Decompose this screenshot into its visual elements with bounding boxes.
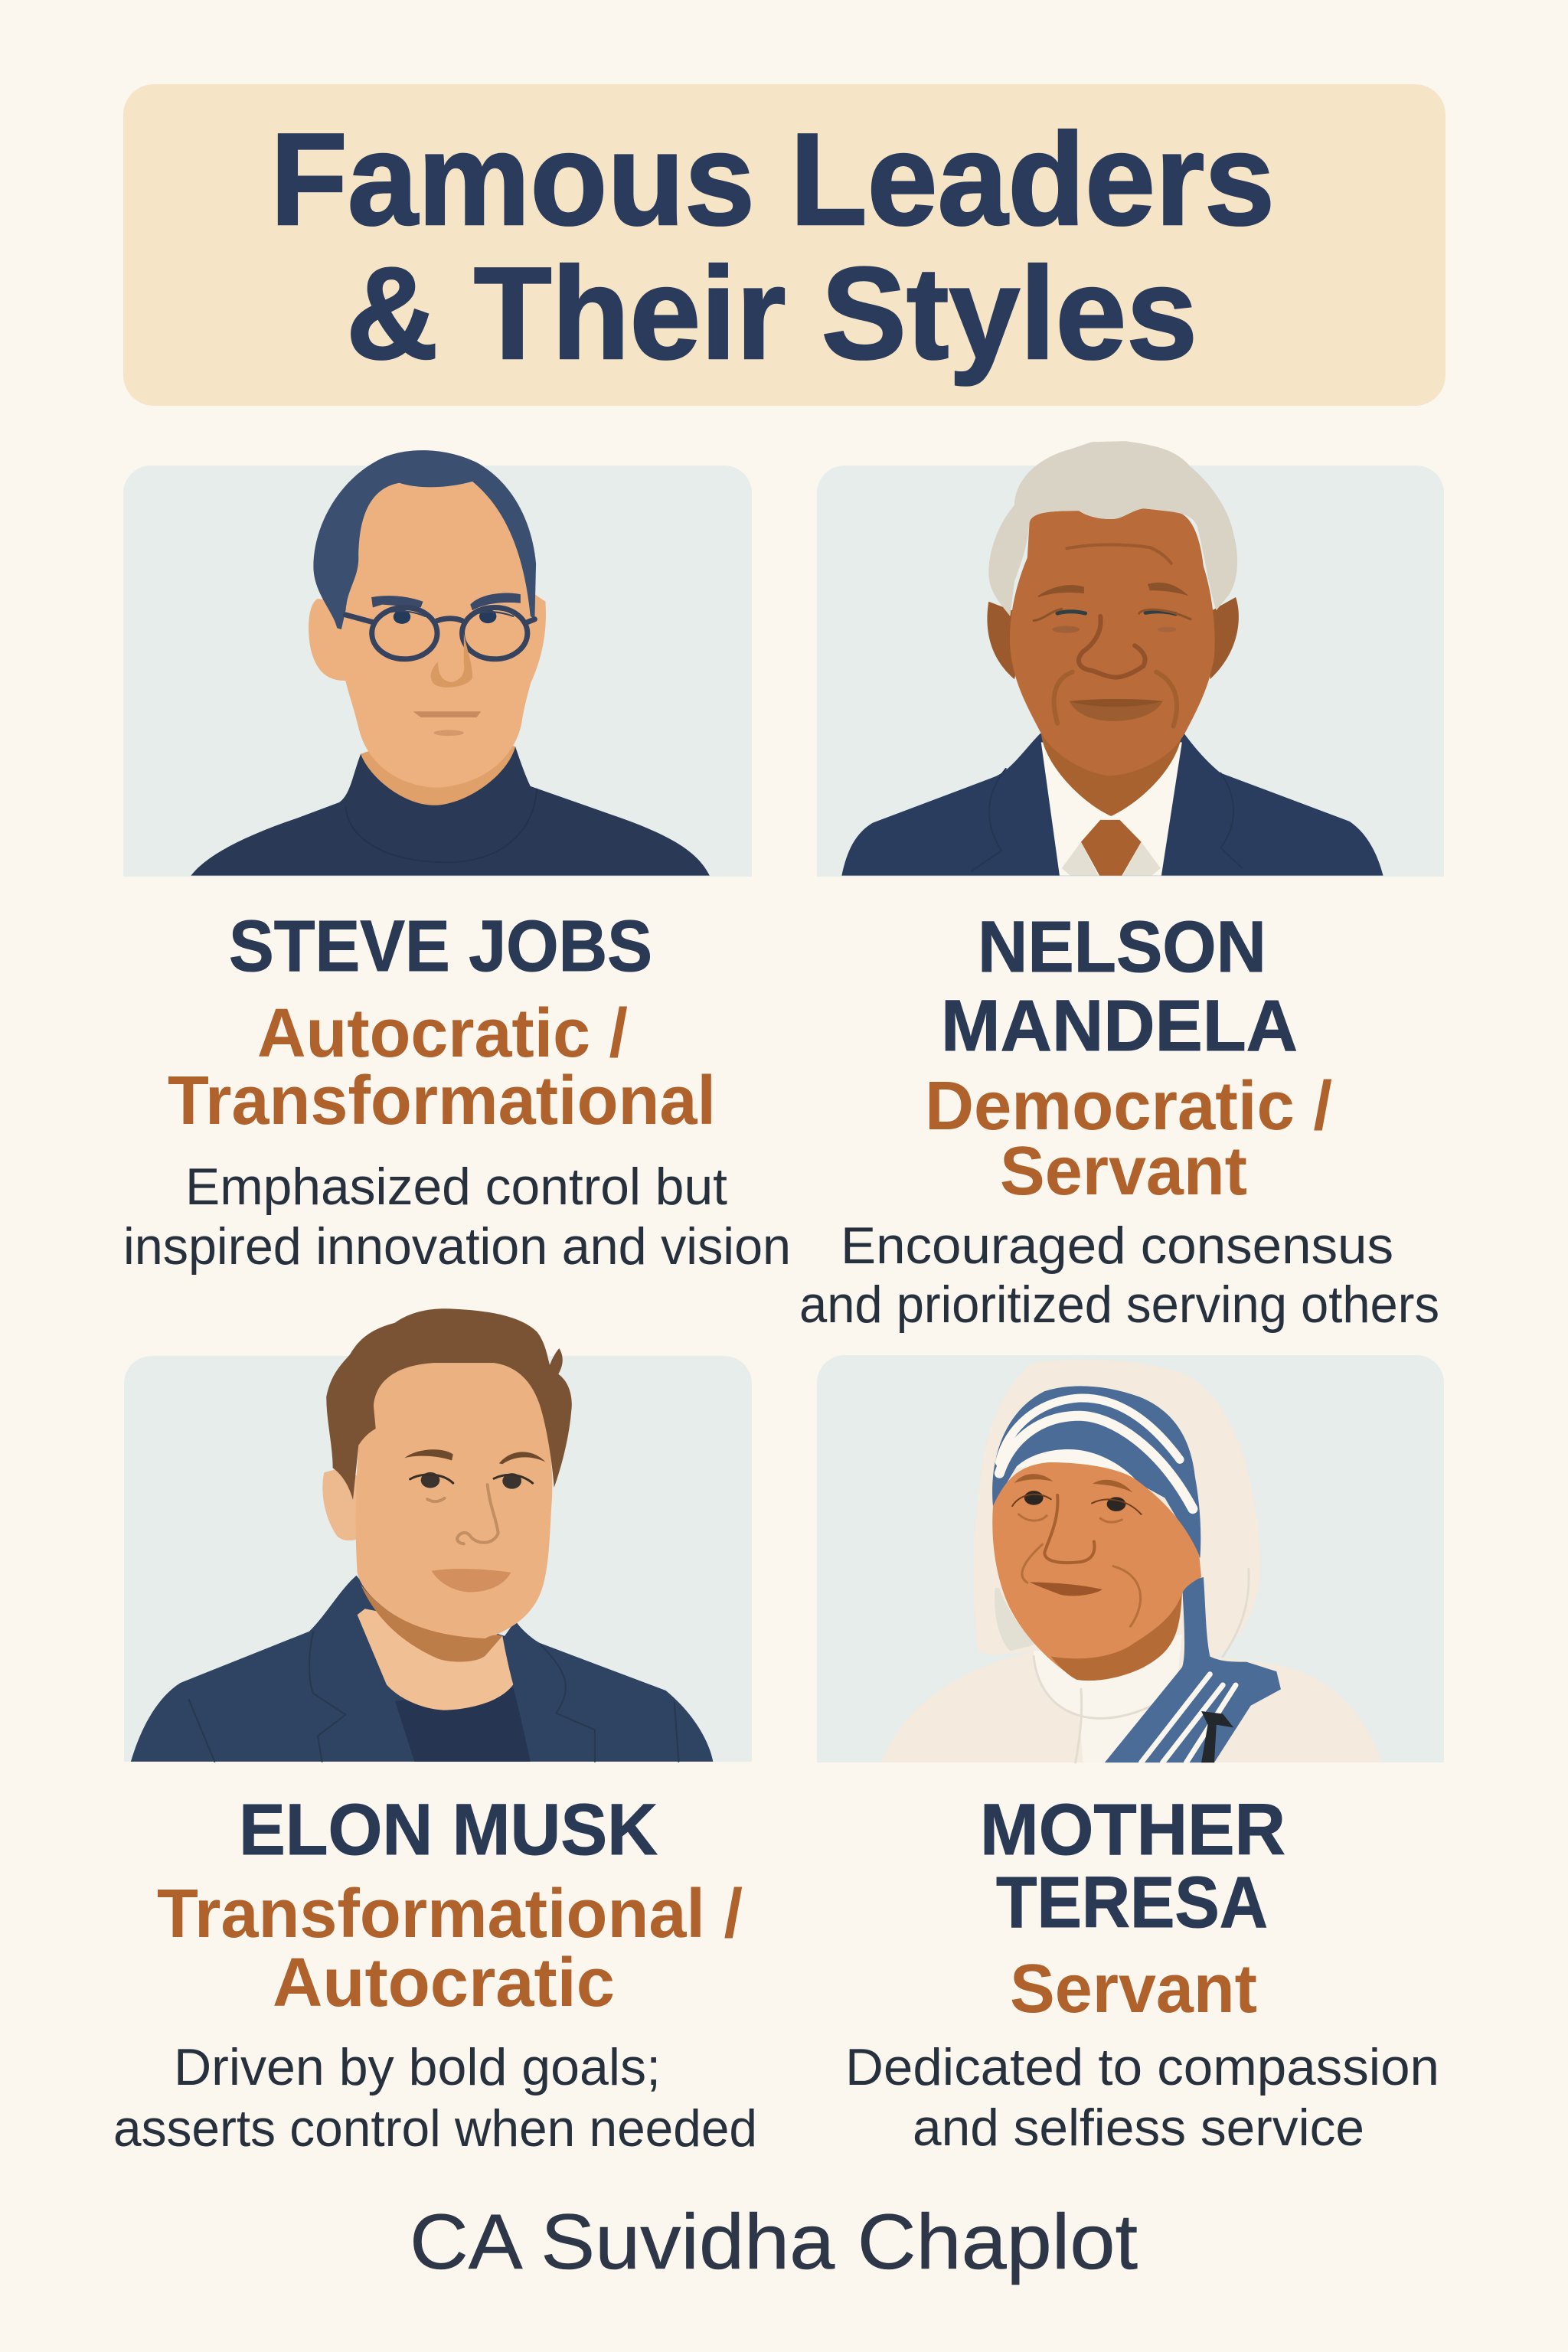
name: Mother Teresa: MOTHER xyxy=(980,1789,1285,1870)
panel: Elon Musk portrait background xyxy=(124,1356,752,1762)
title: Famous Leaders xyxy=(270,106,1275,253)
style: Democratic / Servant xyxy=(925,1068,1332,1210)
portrait: Steve Jobs xyxy=(191,450,710,876)
style: Autocratic / Transformational: Transformational xyxy=(168,1063,716,1139)
name: Mother Teresa: TERESA xyxy=(996,1862,1268,1943)
description: Elon Musk xyxy=(113,2038,757,2158)
portrait: Mother Teresa xyxy=(881,1360,1382,1762)
panel: Mother Teresa portrait background xyxy=(817,1355,1444,1762)
text block: Elon Musk xyxy=(113,1789,757,2158)
title xyxy=(270,106,1275,387)
name: Elon Musk: ELON MUSK xyxy=(239,1789,658,1870)
style: Autocratic / Transformational: Autocratic / xyxy=(257,995,628,1072)
panel: Nelson Mandela portrait background xyxy=(817,466,1444,877)
style: Servant: Servant xyxy=(1010,1951,1257,2027)
description: Steve Jobs: inspired innovation and vision xyxy=(123,1217,791,1276)
text block: Nelson Mandela xyxy=(799,906,1439,1334)
portrait: Elon Musk xyxy=(131,1308,713,1762)
style: Democratic / Servant: Servant xyxy=(1000,1133,1247,1210)
style: Transformational / Autocratic: Autocratic xyxy=(273,1945,615,2021)
description: Steve Jobs: Emphasized control but xyxy=(185,1158,727,1216)
description: Nelson Mandela: Encouraged consensus xyxy=(841,1217,1393,1275)
name: Steve Jobs: STEVE JOBS xyxy=(229,906,652,987)
text block: Steve Jobs xyxy=(123,906,791,1276)
style: Transformational / Autocratic xyxy=(157,1876,743,2021)
style: Autocratic / Transformational xyxy=(168,995,716,1139)
description: Mother Teresa: Dedicated to compassion xyxy=(845,2038,1439,2096)
description: Mother Teresa: and selfiess service xyxy=(913,2099,1364,2157)
portrait: Nelson Mandela xyxy=(841,441,1383,876)
description: Steve Jobs xyxy=(123,1158,791,1276)
style: Democratic / Servant: Democratic / xyxy=(925,1068,1332,1145)
title panel xyxy=(123,84,1446,406)
name: Nelson Mandela xyxy=(941,906,1298,1067)
name: Nelson Mandela: NELSON xyxy=(978,906,1266,988)
footer credit: CA Suvidha Chaplot xyxy=(410,2198,1138,2285)
description: Mother Teresa xyxy=(845,2038,1439,2157)
name: Mother Teresa xyxy=(980,1789,1285,1943)
description: Elon Musk: asserts control when needed xyxy=(113,2099,757,2158)
style: Transformational / Autocratic: Transformational / xyxy=(157,1876,743,1952)
text block: Mother Teresa xyxy=(845,1789,1439,2157)
description: Elon Musk: Driven by bold goals; xyxy=(174,2038,661,2096)
name: Nelson Mandela: MANDELA xyxy=(941,985,1298,1067)
panel: Steve Jobs portrait background xyxy=(123,466,752,877)
description: Nelson Mandela xyxy=(799,1217,1439,1334)
description: Nelson Mandela: and prioritized serving others xyxy=(799,1276,1439,1334)
title: & Their Styles xyxy=(346,240,1197,387)
